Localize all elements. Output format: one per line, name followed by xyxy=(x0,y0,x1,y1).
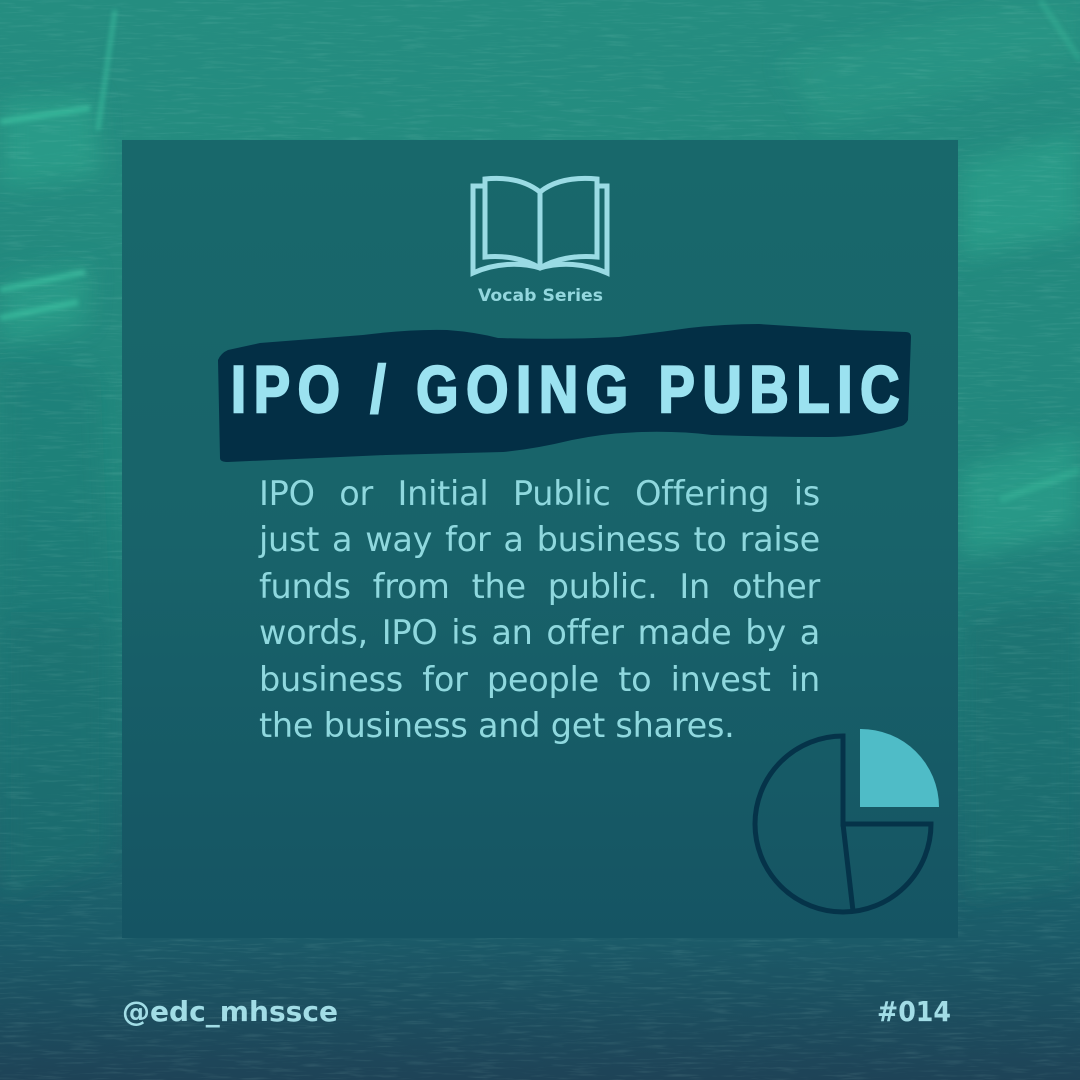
footer handle: @edc_mhssce xyxy=(122,995,338,1028)
footer issue number: #014 xyxy=(877,995,951,1028)
panel xyxy=(122,140,958,938)
body text: IPO or Initial Public Offering is xyxy=(259,474,820,512)
body text: the business and get shares. xyxy=(259,706,735,745)
body text: words, IPO is an offer made by a xyxy=(259,613,820,652)
icon: open book xyxy=(473,178,607,273)
body text: funds from the public. In other xyxy=(259,567,820,606)
pie outline xyxy=(755,736,931,912)
pie highlighted slice xyxy=(860,729,939,807)
body text: business for people to invest in xyxy=(259,660,820,699)
body text xyxy=(258,474,820,745)
body text: just a way for a business to raise xyxy=(259,520,820,559)
title highlight blob xyxy=(218,324,911,462)
series label: Vocab Series xyxy=(478,286,603,306)
title: IPO / GOING PUBLIC xyxy=(231,352,899,426)
icon: pie chart xyxy=(755,729,939,912)
